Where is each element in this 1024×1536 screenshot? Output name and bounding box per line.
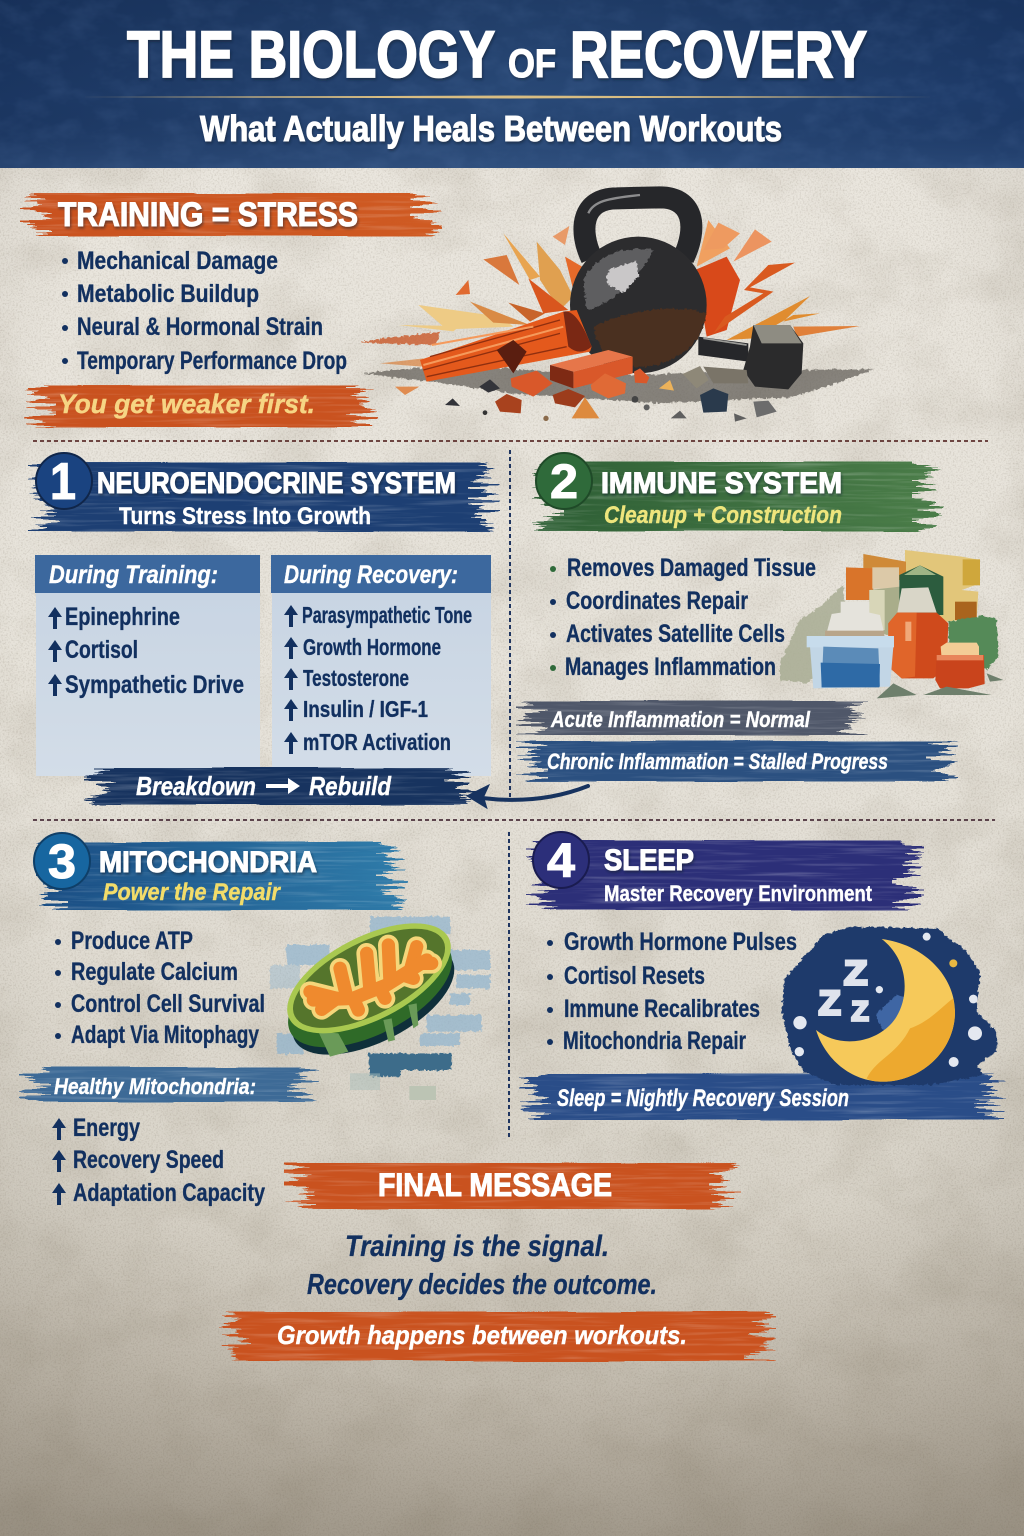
callout: you get weaker first: You get weaker first. [58,389,315,419]
heading banner 2: 2 [550,456,578,509]
box: during recovery: Parasympathetic Tone [302,602,472,628]
panel: neuroendocrine system [35,453,588,807]
zzz letters: Z [819,984,841,1022]
mitochondria bullet list: Regulate Calcium [71,958,238,986]
box: during training [35,555,260,776]
stress bullet list [62,247,347,375]
panel: mitochondria [34,833,490,1207]
banner: breakdown to rebuild [100,768,460,805]
box: during recovery: Insulin / IGF-1 [303,696,428,722]
banner: final message: FINAL MESSAGE [378,1167,612,1203]
sleep bullet list: Mitochondria Repair [563,1027,746,1055]
box: during training: Epinephrine [65,603,180,631]
heading banner 4: Master Recovery Environment [604,881,873,906]
immune bullet list: Coordinates Repair [566,587,748,615]
banner: sleep = nightly recovery session: Sleep = Nightly Recovery Session [557,1085,849,1112]
banner: breakdown to rebuild: Rebuild [309,771,392,801]
stress bullet list: Neural & Hormonal Strain [77,313,323,341]
heading banner 3 [34,833,392,910]
banner: healthy mitochondria: Healthy Mitochondria: [54,1074,256,1099]
banner: growth happens between workouts [235,1312,760,1361]
mitochondria bullet list [55,927,265,1049]
icon: supplements and jars [780,550,1003,698]
arrow: immune system to rebuild [468,786,588,807]
zzz letters: Z [844,954,867,992]
immune bullet list [550,554,816,681]
panel: training = stress [36,193,873,427]
sleep bullet list: Growth Hormone Pulses [564,928,797,956]
zzz letters: Z [851,995,869,1026]
box: during recovery: During Recovery: [284,561,458,589]
box: during training: Sympathetic Drive [65,671,244,699]
header banner [0,0,1024,168]
stress bullet list: Mechanical Damage [77,247,278,275]
heading banner 3: MITOCHONDRIA [99,846,317,879]
panel: immune system [532,453,1003,781]
heading banner 2 [536,453,928,531]
message text: Training is the signal. [345,1230,609,1263]
box: during recovery: Growth Hormone [303,634,441,660]
heading banner 2: Cleanup + Construction [604,502,842,529]
message text [307,1230,657,1301]
subtitle: What Actually Heals Between Workouts [200,108,782,149]
healthy mitochondria list [52,1114,265,1207]
heading banner 3: Power the Repair [103,879,281,906]
mitochondria bullet list: Produce ATP [71,927,193,955]
box: during recovery [271,555,491,776]
message text: Recovery decides the outcome. [307,1269,657,1301]
panel: sleep [533,832,997,1120]
box: during recovery: Testosterone [303,665,409,691]
title: OF [508,42,556,86]
title: THE BIOLOGY [127,17,495,91]
icon: kettlebell, torn muscle and bricks [360,195,873,422]
immune bullet list: Manages Inflammation [565,653,776,681]
banner: final message [300,1163,725,1209]
icon: crescent moon and z's [782,927,997,1085]
banner: healthy mitochondria [35,1067,303,1102]
heading banner 4: SLEEP [604,844,694,877]
immune bullet list: Activates Satellite Cells [566,620,785,648]
box: during training: During Training: [49,561,218,589]
callout: chronic inflammation: Chronic Inflammation = Stalled Progress [547,749,888,774]
healthy mitochondria list: Recovery Speed [73,1146,224,1174]
title [127,17,867,91]
panel: final message [235,1163,760,1361]
heading banner 2: IMMUNE SYSTEM [601,467,842,500]
heading banner 1: Turns Stress Into Growth [119,503,371,530]
mitochondria bullet list: Control Cell Survival [71,990,265,1018]
sleep bullet list [547,928,797,1055]
box: during recovery: mTOR Activation [303,729,451,755]
icon: mitochondrion [270,901,490,1100]
stress bullet list: Metabolic Buildup [77,280,259,308]
heading banner 1: 1 [50,453,76,511]
box: during training: Cortisol [65,636,138,664]
banner: sleep = nightly recovery session [535,1074,990,1120]
heading banner 3: 3 [48,836,76,889]
healthy mitochondria list: Energy [73,1114,140,1142]
heading banner 4: 4 [547,835,575,888]
callout: acute inflammation: Acute Inflammation = Normal [550,707,811,732]
heading banner: training = stress: TRAINING = STRESS [58,196,358,234]
stress bullet list: Temporary Performance Drop [77,347,347,375]
callout: chronic inflammation [532,741,942,781]
mitochondria bullet list: Adapt Via Mitophagy [71,1021,259,1049]
heading banner 1 [36,453,484,532]
title: RECOVERY [570,17,867,91]
callout: acute inflammation [532,701,852,735]
callout: you get weaker first [40,385,362,427]
banner: breakdown to rebuild: Breakdown [136,771,256,801]
banner: growth happens between workouts: Growth happens between workouts. [277,1320,687,1350]
sleep bullet list: Cortisol Resets [564,962,705,990]
zzz letters [819,954,869,1026]
healthy mitochondria list: Adaptation Capacity [73,1179,265,1207]
sleep bullet list: Immune Recalibrates [564,995,760,1023]
heading banner 1: NEUROENDOCRINE SYSTEM [97,467,456,500]
immune bullet list: Removes Damaged Tissue [567,554,816,582]
section dividers [33,441,995,1140]
heading banner 4 [533,832,908,910]
